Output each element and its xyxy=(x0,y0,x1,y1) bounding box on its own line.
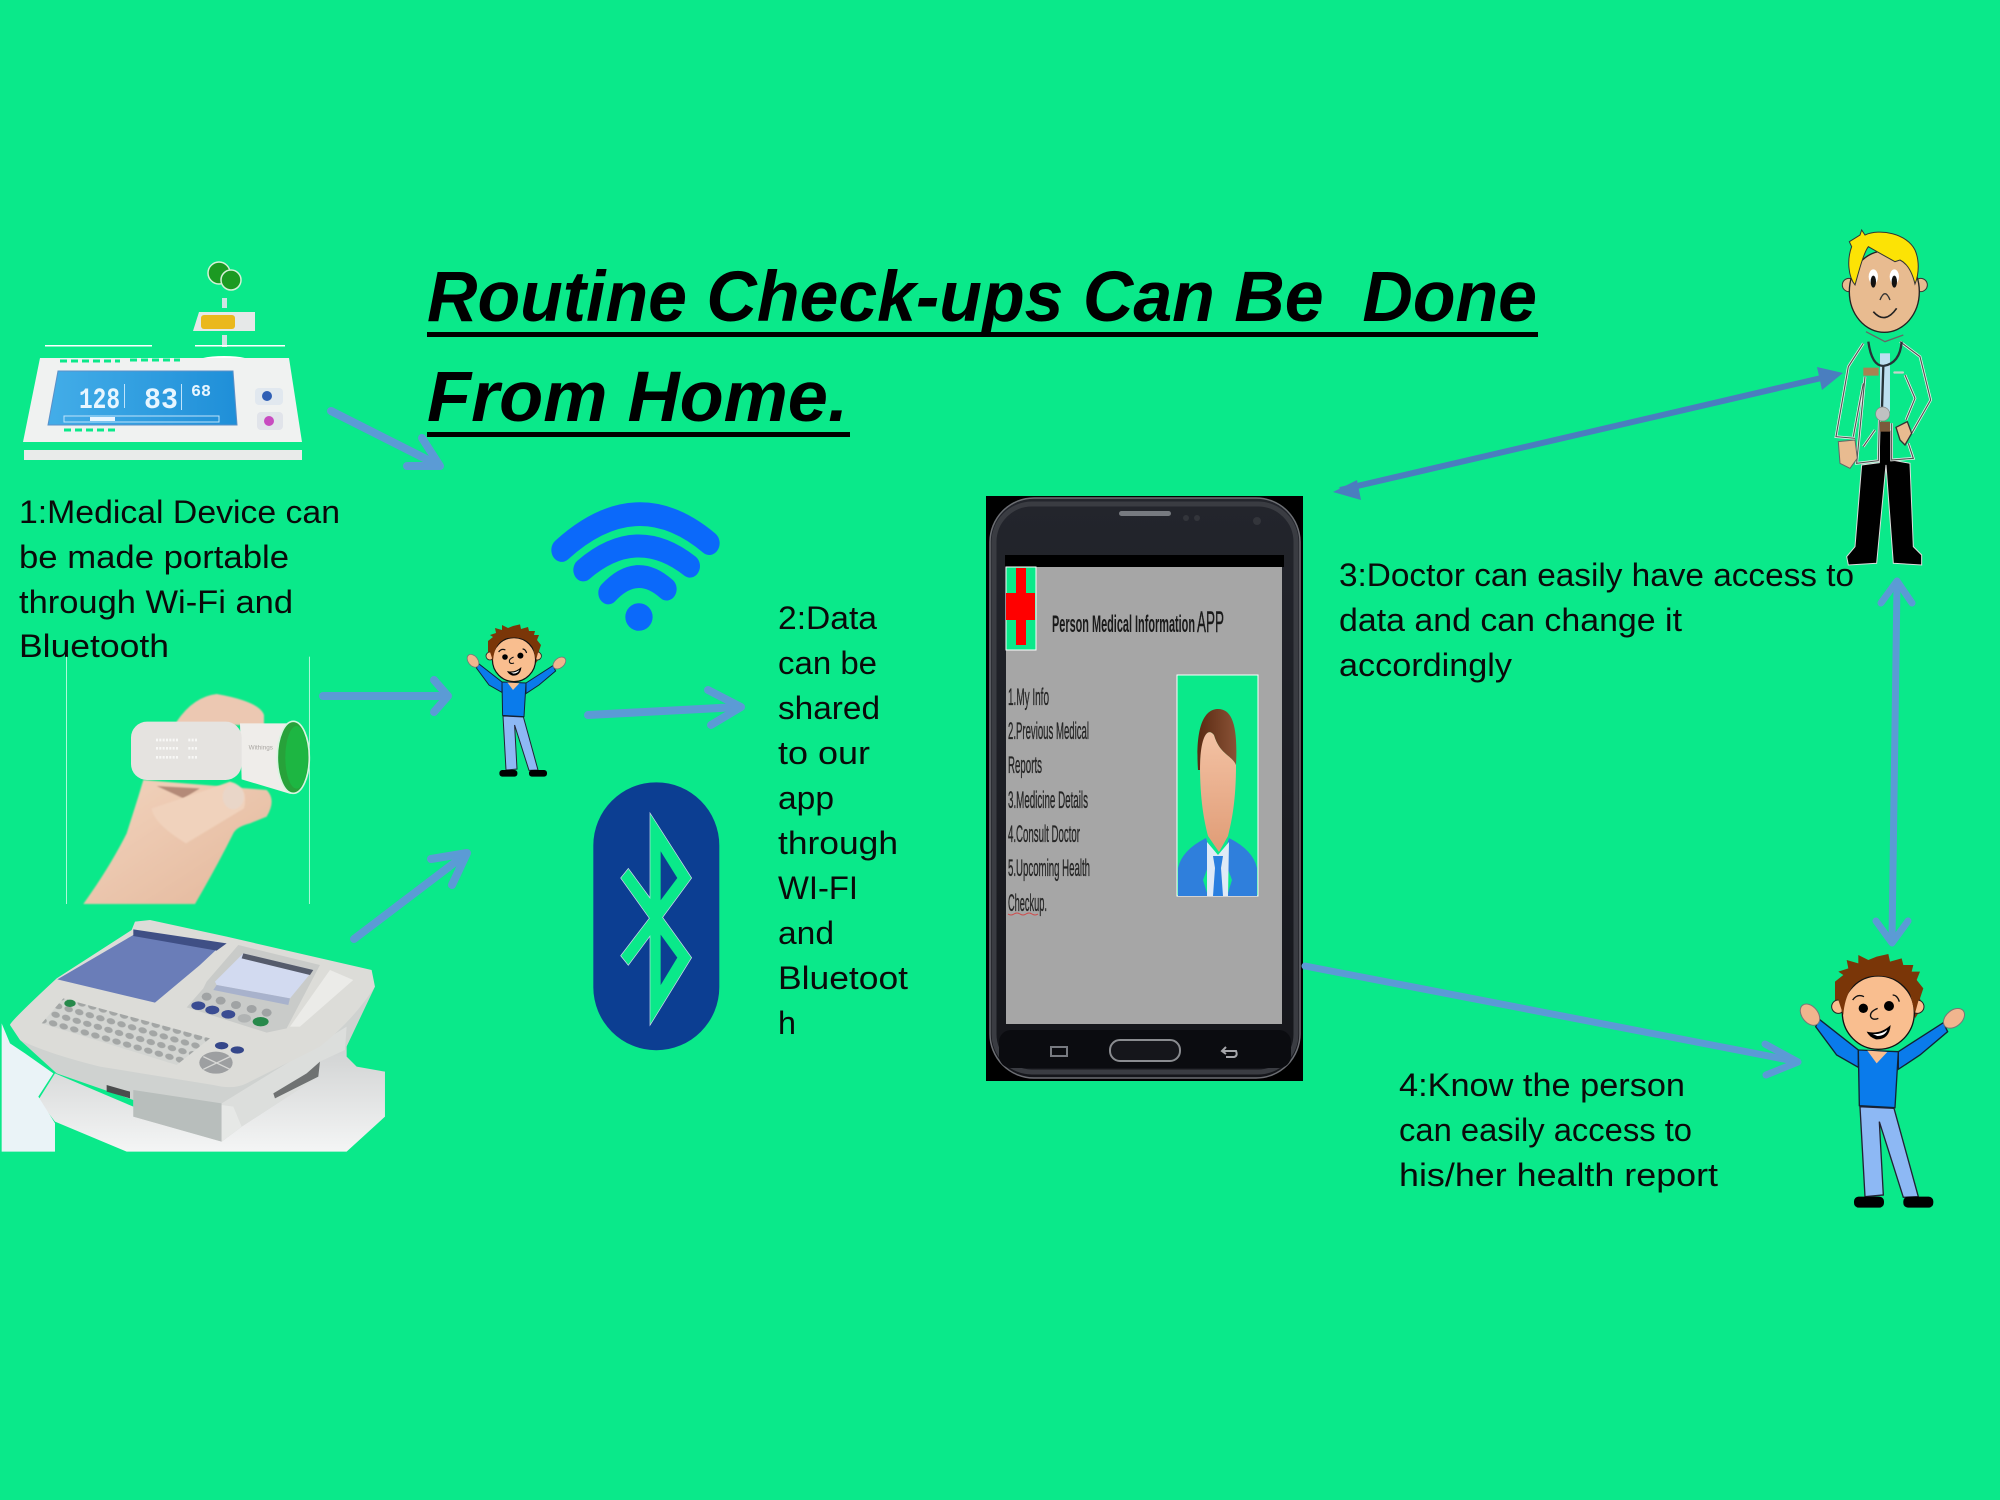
hand xyxy=(83,694,272,904)
panel: smartphone app: 4.Consult Doctor xyxy=(1008,821,1080,848)
text block: step 2: through xyxy=(778,825,898,861)
machine silhouette xyxy=(20,987,375,1142)
face xyxy=(1869,269,1878,284)
icon: doctor xyxy=(1836,230,1931,565)
text block: step 4: 4:Know the person xyxy=(1399,1067,1685,1103)
text block: step 3: data and can change it xyxy=(1339,602,1682,638)
arrow: person to app xyxy=(588,690,741,725)
title: From Home. xyxy=(427,358,848,437)
text block: step 3: accordingly xyxy=(1339,647,1512,683)
hair xyxy=(1849,230,1918,285)
text block: step 1: Bluetooth xyxy=(19,628,169,664)
app menu list xyxy=(1008,684,1090,917)
text block: step 2: can be xyxy=(778,645,877,681)
app title xyxy=(1052,606,1224,639)
text block: step 2: app xyxy=(778,780,834,816)
icon: Wi-Fi xyxy=(562,514,709,631)
text block: step 3 xyxy=(1339,557,1854,683)
phone buttons xyxy=(1051,1040,1237,1061)
spirometer display xyxy=(156,740,198,757)
text block: step 2 xyxy=(778,600,908,1041)
machine top xyxy=(10,920,375,1087)
panel: smartphone app: 2.Previous Medical xyxy=(1008,718,1089,745)
icon: patient xyxy=(1796,954,1968,1208)
device screen xyxy=(48,371,237,425)
text block: step 2: to our xyxy=(778,735,870,771)
icon: SIM card xyxy=(193,312,255,331)
app menu list: Reports xyxy=(1008,752,1042,779)
screen xyxy=(1005,555,1284,567)
icon: chat bubbles xyxy=(208,262,241,290)
text block: step 2: WI-FI xyxy=(778,870,858,906)
head xyxy=(1842,278,1856,292)
icon: Bluetooth xyxy=(593,782,719,1050)
shadow xyxy=(38,1043,385,1152)
spirometer body xyxy=(240,723,291,794)
text block: step 2: 2:Data xyxy=(778,600,877,636)
text block: step 1: 1:Medical Device can xyxy=(19,494,340,530)
display buttons xyxy=(191,993,272,1026)
device buttons xyxy=(255,388,283,405)
arrow: spirometer to person xyxy=(323,680,448,712)
icon: blood pressure monitor with SIM and chat: 68 xyxy=(191,383,211,402)
panel: smartphone app: 3.Medicine Details xyxy=(1008,787,1088,814)
title xyxy=(427,258,1538,437)
icon: spirometer in hand: Withings xyxy=(249,744,273,751)
text block: step 1 xyxy=(19,494,340,664)
profile photo xyxy=(1177,675,1258,896)
text block: step 1: through Wi-Fi and xyxy=(19,584,293,620)
app menu list: 1.My Info xyxy=(1008,684,1049,711)
text block: step 3: 3:Doctor can easily have access to xyxy=(1339,557,1854,593)
icon: spirometer in hand xyxy=(66,657,310,904)
icon: blood pressure monitor with SIM and chat xyxy=(23,262,302,460)
coat outline xyxy=(1836,342,1931,463)
text block: step 2: and xyxy=(778,915,834,951)
panel: smartphone app: 5.Upcoming Health xyxy=(1008,855,1090,882)
text block: step 2: shared xyxy=(778,690,880,726)
text block: step 4: can easily access to xyxy=(1399,1112,1692,1148)
icon: person with devices xyxy=(465,624,568,777)
hands xyxy=(1838,440,1857,468)
arrow: ECG to person xyxy=(354,853,467,939)
text block: step 2: h xyxy=(778,1005,796,1041)
icon: ECG machine xyxy=(2,920,385,1152)
arrow: monitor to person xyxy=(331,411,440,466)
phone speaker xyxy=(1119,511,1171,516)
arrow: app and doctor two-way xyxy=(1333,367,1843,500)
trousers xyxy=(1847,430,1922,565)
keyboard xyxy=(42,998,210,1065)
arrow: doctor and patient two-way xyxy=(1876,581,1912,943)
panel: smartphone app: APP xyxy=(1197,606,1224,639)
icon: blood pressure monitor with SIM and chat: 83 xyxy=(144,384,178,418)
tie and stethoscope xyxy=(1880,353,1890,412)
text block: step 1: be made portable xyxy=(19,539,289,575)
icon: red cross xyxy=(1006,567,1036,650)
paper tray xyxy=(57,935,217,1003)
machine base xyxy=(133,1090,222,1142)
text block: step 4 xyxy=(1399,1067,1718,1193)
text block: step 2: Bluetoot xyxy=(778,960,908,996)
panel: smartphone app xyxy=(986,496,1303,1081)
title: Routine Check-ups Can Be Done xyxy=(427,258,1537,337)
device body xyxy=(23,358,302,442)
icon: blood pressure monitor with SIM and chat: 128 xyxy=(79,384,120,418)
app title: Person Medical Information xyxy=(1052,611,1195,638)
text block: step 4: his/her health report xyxy=(1399,1157,1718,1193)
app menu list: Checkup. xyxy=(1008,890,1047,917)
arrow: app to patient xyxy=(1305,966,1798,1075)
display xyxy=(187,945,320,1033)
thumb xyxy=(152,782,245,843)
